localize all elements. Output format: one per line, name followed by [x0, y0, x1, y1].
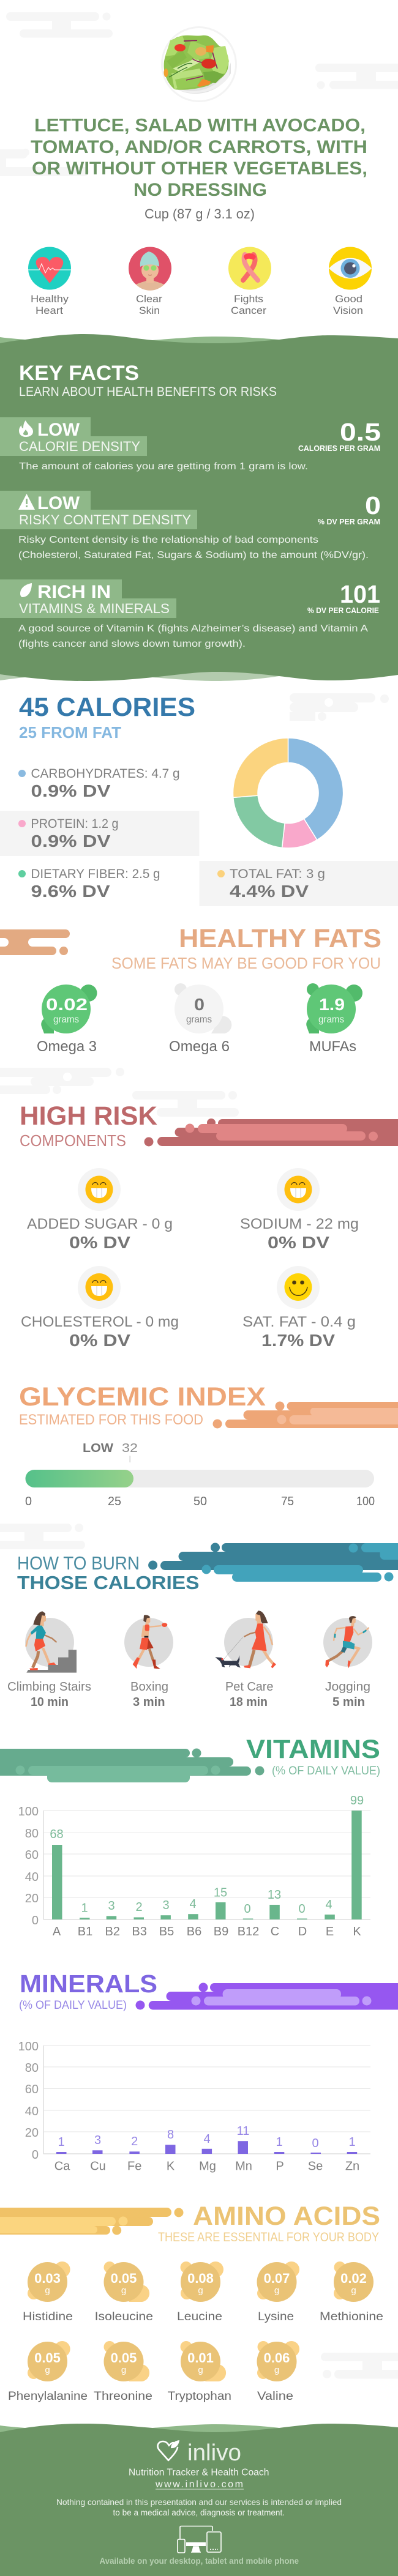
- heading: how to burn: [17, 1552, 200, 1593]
- legend: protein: 0.9% DV: [31, 832, 111, 851]
- fact: rich in vitamins and minerals: [0, 579, 380, 649]
- bar chart: vitamins: 68: [50, 1828, 64, 1841]
- benefit: healthy heart: Heart: [36, 305, 63, 316]
- stat: MUFAs: [306, 983, 362, 1055]
- amino: methionine: Methionine: [320, 2310, 383, 2323]
- logo: inlivo: inlivo: [187, 2440, 241, 2466]
- bar chart: minerals: 0: [32, 2148, 39, 2162]
- activity: pet care: 18 min: [230, 1696, 268, 1709]
- activity: climbing stairs: Climbing Stairs: [7, 1680, 91, 1694]
- bar chart: vitamins: B3: [132, 1925, 147, 1938]
- stat: omega 3: 0.02: [46, 995, 88, 1014]
- benefit: clear skin: Skin: [139, 305, 160, 316]
- risk: added sugar: 0% DV: [69, 1233, 130, 1252]
- subheading: key facts: LEARN ABOUT HEALTH BENEFITS OR RISKS: [19, 385, 277, 399]
- heading: high risk: HIGH RISK: [20, 1101, 157, 1131]
- benefit: fights cancer: Fights: [234, 293, 263, 305]
- legend: carbohydrates: 0.9% DV: [31, 781, 111, 800]
- benefit: fights cancer: Cancer: [231, 305, 266, 316]
- subheading: glycemic index: ESTIMATED FOR THIS FOOD: [19, 1412, 203, 1428]
- stat: omega 6: grams: [186, 1014, 212, 1025]
- bar chart: vitamins: 4: [325, 1898, 332, 1912]
- icon: warning triangle: [18, 494, 35, 510]
- heading: amino acids: AMINO ACIDS: [193, 2202, 380, 2231]
- serving size: Cup (87 g / 3.1 oz): [145, 206, 255, 221]
- legend: total fat: [200, 861, 398, 906]
- legend: total fat: 4.4% DV: [230, 882, 309, 901]
- fact: risky content density: Risky Content density is the relationship of bad components: [18, 535, 318, 545]
- stat: MUFAs: grams: [318, 1014, 344, 1025]
- benefit: healthy heart: Healthy: [31, 293, 69, 305]
- amino: threonine: Threonine: [94, 2390, 152, 2403]
- fact: rich in vitamins and minerals: VITAMINS & MINERALS: [19, 601, 170, 616]
- amino: tryptophan: [168, 2341, 231, 2403]
- bar chart: minerals: 1: [276, 2135, 283, 2149]
- bar chart: vitamins: B12: [238, 1925, 259, 1938]
- bar chart: vitamins: 20: [25, 1892, 39, 1905]
- amino: methionine: g: [351, 2285, 356, 2296]
- legend: dietary fiber: 9.6% DV: [31, 882, 110, 901]
- bar chart: minerals: 100: [18, 2040, 39, 2053]
- risk: added sugar: ADDED SUGAR - 0 g: [27, 1216, 173, 1232]
- activity: jogging: 5 min: [332, 1696, 365, 1709]
- amino: histidine: g: [45, 2285, 50, 2296]
- benefit: clear skin: [129, 247, 171, 316]
- amino: valine: g: [274, 2365, 279, 2375]
- amino: lysine: [257, 2261, 299, 2323]
- subheading: vitamins: (% OF DAILY VALUE): [272, 1765, 380, 1778]
- fact: risky content density: 0: [365, 491, 381, 519]
- risk: cholesterol: [21, 1266, 179, 1350]
- bar chart: vitamins: B6: [187, 1925, 201, 1938]
- fact: rich in vitamins and minerals: % DV PER CALORIE: [307, 606, 379, 615]
- bar chart: minerals: Mg: [199, 2160, 216, 2173]
- fact: calorie density: 0.5: [340, 418, 381, 446]
- decoration: mineral bars: [136, 1982, 398, 2009]
- fact: risky content density: LOW: [37, 493, 80, 513]
- heading: calories: 45 CALORIES: [19, 693, 195, 722]
- benefit: healthy heart: [28, 247, 71, 316]
- activity: climbing stairs: 10 min: [31, 1696, 69, 1709]
- amino: phenylalanine: 0.05: [34, 2350, 61, 2366]
- bar chart: vitamins: E: [326, 1925, 334, 1938]
- fact: calorie density: CALORIE DENSITY: [19, 439, 140, 454]
- gauge: glycemic index: 32: [122, 1442, 138, 1455]
- amino: leucine: Leucine: [177, 2310, 222, 2323]
- amino: methionine: 0.02: [340, 2271, 367, 2286]
- subheading: from fat: 25 FROM FAT: [19, 723, 121, 742]
- decoration: healthy fats bars: [0, 929, 70, 955]
- bar chart: minerals: Ca: [54, 2160, 70, 2173]
- bar chart: minerals: [18, 2040, 370, 2173]
- bar chart: vitamins: B2: [105, 1925, 120, 1938]
- risk: added sugar: [27, 1168, 173, 1252]
- activity: boxing: [124, 1615, 173, 1709]
- legend: carbohydrates: CARBOHYDRATES: 4.7 g: [31, 767, 180, 781]
- legend: dietary fiber: DIETARY FIBER: 2.5 g: [31, 867, 160, 881]
- amino: histidine: 0.03: [34, 2271, 61, 2286]
- bar chart: vitamins: [18, 1794, 370, 1938]
- amino: phenylalanine: Phenylalanine: [8, 2390, 88, 2403]
- disclaimer: [56, 2497, 342, 2517]
- amino: leucine: g: [198, 2285, 203, 2296]
- amino: lysine: g: [274, 2285, 279, 2296]
- donut chart: macronutrients: [233, 738, 344, 848]
- title: [31, 115, 367, 200]
- stat: omega 3: Omega 3: [37, 1038, 97, 1055]
- bar chart: minerals: K: [167, 2160, 175, 2173]
- risk: sodium: [240, 1168, 359, 1252]
- bar chart: minerals: 11: [237, 2124, 249, 2138]
- amino: tryptophan: Tryptophan: [168, 2390, 231, 2403]
- amino: valine: Valine: [257, 2390, 293, 2403]
- fact: rich in vitamins and minerals: RICH IN: [37, 582, 111, 602]
- amino: threonine: g: [121, 2365, 126, 2375]
- bar chart: vitamins: 0: [244, 1902, 251, 1916]
- fact: risky content density: [0, 491, 381, 560]
- disclaimer: to be a medical advice, diagnosis or treatment.: [113, 2507, 285, 2517]
- bar chart: vitamins: 3: [162, 1899, 170, 1912]
- amino: threonine: 0.05: [111, 2350, 137, 2366]
- bar chart: minerals: Cu: [90, 2160, 106, 2173]
- fact: rich in vitamins and minerals: 101: [340, 580, 380, 608]
- title: TOMATO, AND/OR CARROTS, WITH: [31, 137, 367, 157]
- amino: leucine: 0.08: [187, 2271, 214, 2286]
- icon: devices: [178, 2526, 221, 2553]
- risk: saturated fat: SAT. FAT - 0.4 g: [242, 1314, 356, 1330]
- bar chart: minerals: 3: [94, 2134, 101, 2147]
- logo: inlivo: [158, 2440, 241, 2466]
- bar chart: vitamins: K: [353, 1925, 361, 1938]
- amino: tryptophan: 0.01: [187, 2350, 214, 2366]
- heading: healthy fats: HEALTHY FATS: [179, 924, 381, 953]
- subheading: healthy fats: SOME FATS MAY BE GOOD FOR YOU: [111, 954, 381, 972]
- decoration: glycemic bars: [213, 1401, 398, 1428]
- title: NO DRESSING: [133, 180, 267, 200]
- panel: footer: [0, 2424, 398, 2576]
- decoration: burn bars: [148, 1543, 398, 1582]
- bar chart: minerals: 1: [348, 2135, 356, 2149]
- bar chart: minerals: Se: [308, 2160, 323, 2173]
- fact: calorie density: LOW: [37, 420, 80, 440]
- fact: calorie density: The amount of calories you are getting from 1 gram is low.: [19, 461, 308, 472]
- decoration: amino acid bars: [0, 2208, 184, 2235]
- bar chart: minerals: 2: [131, 2135, 138, 2148]
- benefit: fights cancer: [228, 247, 271, 316]
- stat: MUFAs: 1.9: [319, 995, 345, 1014]
- heading: how to burn: THOSE CALORIES: [17, 1572, 200, 1593]
- bar chart: vitamins: 1: [81, 1902, 88, 1915]
- benefit: good vision: Vision: [333, 305, 363, 316]
- gauge: glycemic index: 75: [281, 1495, 294, 1508]
- bar chart: vitamins: 99: [350, 1794, 364, 1807]
- fact: rich in vitamins and minerals: (fights cancer and slows down tumor growth).: [18, 639, 246, 649]
- amino: isoleucine: [95, 2261, 153, 2323]
- amino: histidine: [23, 2261, 73, 2323]
- stat: omega 3: [37, 985, 97, 1055]
- heading: key facts: KEY FACTS: [19, 362, 139, 385]
- title: OR WITHOUT OTHER VEGETABLES,: [32, 158, 367, 179]
- bar chart: minerals: 40: [25, 2105, 39, 2118]
- amino: isoleucine: 0.05: [111, 2271, 137, 2286]
- availability note: Available on your desktop, tablet and mobile phone: [99, 2556, 299, 2566]
- benefit: clear skin: Clear: [136, 293, 162, 305]
- heading: glycemic index: GLYCEMIC INDEX: [19, 1382, 266, 1412]
- amino: valine: [257, 2341, 299, 2403]
- amino: tryptophan: g: [198, 2365, 203, 2375]
- amino: isoleucine: Isoleucine: [95, 2310, 153, 2323]
- legend: total fat: TOTAL FAT: 3 g: [230, 867, 325, 881]
- stat: omega 3: grams: [53, 1014, 79, 1025]
- panel: key facts: [0, 334, 398, 681]
- fact: risky content density: % DV PER GRAM: [318, 517, 380, 526]
- gauge: glycemic index: 100: [356, 1495, 375, 1508]
- fact: calorie density: [0, 417, 381, 472]
- bar chart: minerals: 20: [25, 2126, 39, 2140]
- stat: omega 6: [169, 983, 231, 1055]
- fact: risky content density: (Cholesterol, Saturated Fat, Sugars & Sodium) to the amount (%DV/gr).: [18, 550, 369, 560]
- heading: how to burn: HOW TO BURN: [17, 1552, 140, 1574]
- risk: sodium: SODIUM - 22 mg: [240, 1216, 359, 1232]
- benefit: good vision: Good: [335, 293, 362, 305]
- bar chart: vitamins: D: [298, 1925, 307, 1938]
- subheading: minerals: (% OF DAILY VALUE): [19, 1999, 127, 2012]
- bar chart: vitamins: 0: [32, 1914, 39, 1927]
- amino: leucine: [177, 2261, 223, 2323]
- activity: boxing: Boxing: [130, 1680, 168, 1694]
- gauge: glycemic index: LOW: [83, 1442, 113, 1455]
- risk: saturated fat: [242, 1266, 356, 1350]
- heading: minerals: MINERALS: [20, 1970, 157, 1998]
- activity: boxing: 3 min: [133, 1696, 165, 1709]
- bar chart: minerals: 0: [312, 2137, 319, 2150]
- bar chart: vitamins: 0: [298, 1902, 306, 1916]
- bar chart: vitamins: B9: [214, 1925, 228, 1938]
- stat: omega 6: Omega 6: [169, 1038, 230, 1055]
- amino: valine: 0.06: [264, 2350, 290, 2366]
- bar chart: vitamins: A: [53, 1925, 61, 1938]
- bar chart: vitamins: 2: [135, 1900, 143, 1914]
- activity: jogging: Jogging: [325, 1680, 370, 1694]
- bar chart: vitamins: B1: [78, 1925, 92, 1938]
- bar chart: minerals: Fe: [127, 2160, 141, 2173]
- tagline: Nutrition Tracker & Health Coach: [129, 2467, 269, 2478]
- risk: saturated fat: 1.7% DV: [261, 1331, 335, 1350]
- risk: cholesterol: CHOLESTEROL - 0 mg: [21, 1314, 179, 1330]
- bar chart: minerals: Mn: [235, 2160, 252, 2173]
- bar chart: minerals: P: [276, 2160, 284, 2173]
- gauge: glycemic index: 0: [25, 1495, 32, 1508]
- bar chart: vitamins: 60: [25, 1848, 39, 1862]
- amino: threonine: [94, 2341, 152, 2403]
- bar chart: vitamins: 100: [18, 1805, 39, 1818]
- amino: histidine: Histidine: [23, 2310, 73, 2323]
- gauge: glycemic index: 25: [108, 1495, 121, 1508]
- risk: cholesterol: 0% DV: [69, 1331, 130, 1350]
- activity: jogging: [323, 1616, 372, 1709]
- bar chart: vitamins: 40: [25, 1871, 39, 1884]
- bar chart: vitamins: 13: [268, 1888, 281, 1902]
- legend: dietary fiber: [18, 867, 160, 901]
- bar chart: minerals: 1: [58, 2135, 65, 2149]
- bar chart: minerals: Zn: [345, 2160, 359, 2173]
- bar chart: vitamins: 80: [25, 1827, 39, 1841]
- amino: phenylalanine: [8, 2341, 88, 2403]
- disclaimer: Nothing contained in this presentation and our services is intended or implied: [56, 2497, 342, 2507]
- amino: isoleucine: g: [121, 2285, 126, 2296]
- stat: MUFAs: MUFAs: [309, 1038, 356, 1055]
- activity: pet care: [215, 1610, 276, 1709]
- heading: vitamins: VITAMINS: [246, 1735, 380, 1764]
- icon: salad plate: [161, 26, 237, 102]
- bar chart: vitamins: B5: [159, 1925, 174, 1938]
- legend: protein: PROTEIN: 1.2 g: [31, 817, 119, 831]
- fact: risky content density: RISKY CONTENT DENSITY: [19, 512, 191, 527]
- amino: lysine: 0.07: [264, 2271, 290, 2286]
- fact: rich in vitamins and minerals: A good source of Vitamin K (fights Alzheimer’s disease) and Vitamin A: [18, 624, 368, 634]
- bar chart: vitamins: 3: [108, 1899, 115, 1913]
- benefit: good vision: [329, 247, 372, 316]
- bar chart: minerals: 4: [203, 2132, 211, 2146]
- bar chart: minerals: 8: [167, 2128, 174, 2142]
- amino: phenylalanine: g: [45, 2365, 50, 2375]
- bar chart: minerals: 80: [25, 2061, 39, 2075]
- legend: protein: [0, 811, 200, 856]
- bar chart: minerals: 60: [25, 2083, 39, 2096]
- fact: calorie density: CALORIES PER GRAM: [298, 444, 380, 453]
- website: www.inlivo.com: [155, 2479, 243, 2490]
- bar chart: vitamins: C: [271, 1925, 279, 1938]
- icon: flame: [19, 420, 33, 437]
- bar chart: vitamins: 4: [189, 1897, 197, 1911]
- stat: omega 6: 0: [194, 995, 205, 1014]
- icon: leaf: [20, 583, 32, 597]
- amino: methionine: [320, 2261, 383, 2323]
- gauge: glycemic index: 50: [193, 1495, 207, 1508]
- bar chart: vitamins: 15: [214, 1886, 227, 1900]
- decoration: vitamin bars: [0, 1749, 265, 1782]
- risk: sodium: 0% DV: [268, 1233, 329, 1252]
- amino: lysine: Lysine: [258, 2310, 294, 2323]
- activity: climbing stairs: [7, 1611, 91, 1709]
- legend: carbohydrates: [18, 767, 180, 800]
- decoration: high risk bars: [145, 1119, 398, 1147]
- activity: pet care: Pet Care: [225, 1680, 273, 1694]
- gauge: glycemic index: [25, 1442, 375, 1508]
- title: LETTUCE, SALAD WITH AVOCADO,: [34, 115, 366, 136]
- subheading: components: COMPONENTS: [20, 1131, 126, 1150]
